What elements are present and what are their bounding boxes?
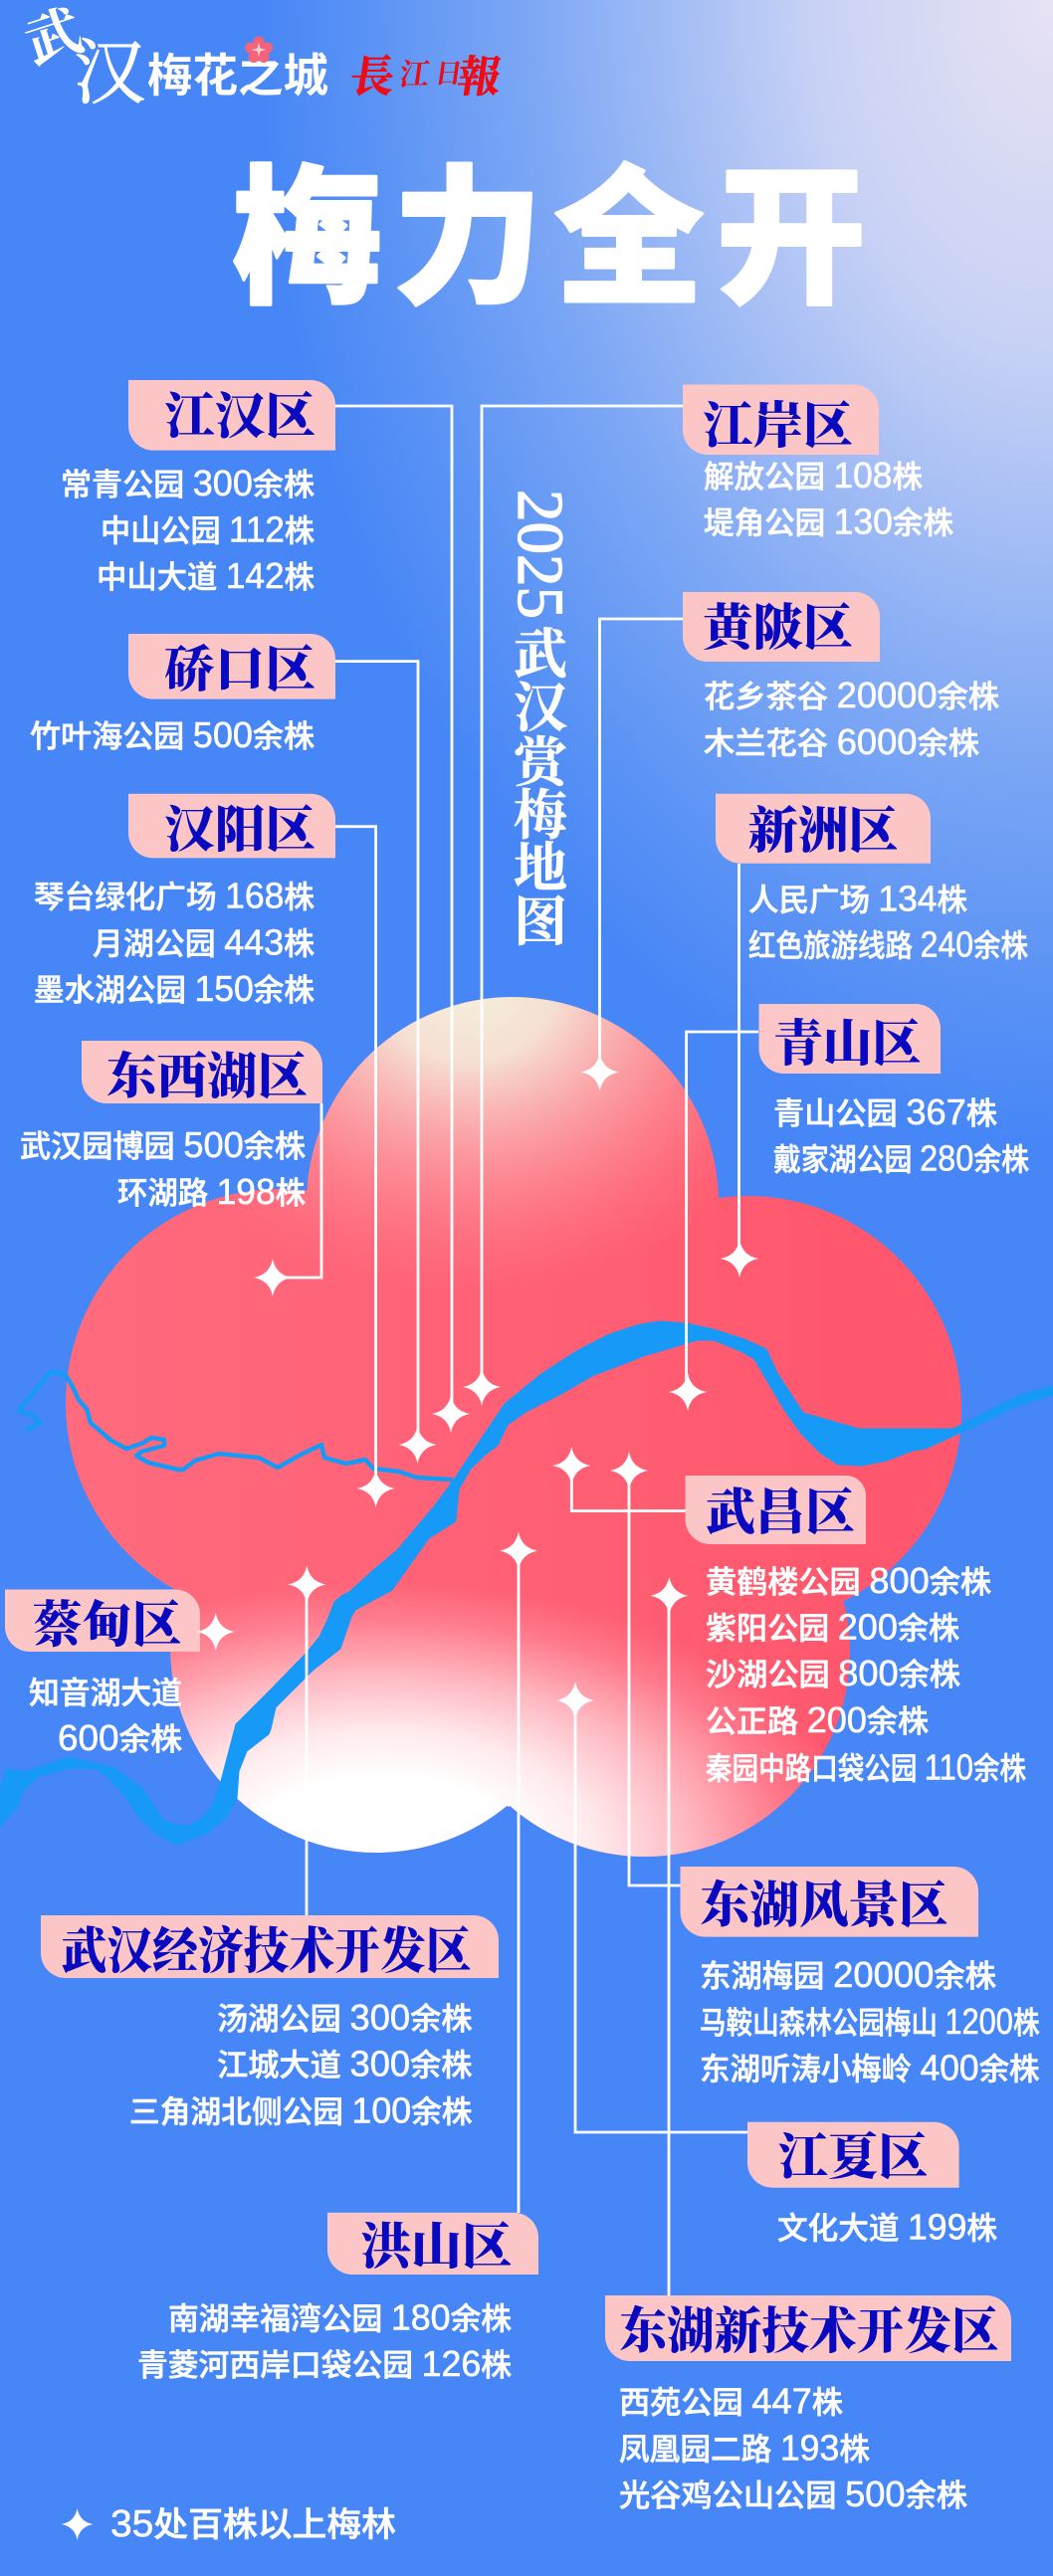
- panel: 黄陂区: 木兰花谷 6000余株: [704, 721, 979, 762]
- connector and marker: 洪山区: [500, 1532, 537, 2213]
- panel: 东西湖区: 环湖路 198株: [117, 1171, 306, 1212]
- panel: 东湖风景区: 马鞍山森林公园梅山 1200株: [700, 2001, 1039, 2042]
- connector and marker: 东西湖区: [254, 1103, 321, 1296]
- logo: 长江日报: 長: [347, 53, 397, 101]
- panel: 新洲区: 红色旅游线路 240余株: [748, 923, 1028, 965]
- logo: 武汉梅花之城: 汉: [74, 34, 145, 113]
- panel: 武昌区: 公正路 200余株: [706, 1699, 929, 1740]
- connector and marker: 江岸区: [463, 406, 683, 1406]
- panel: 东西湖区: [20, 1041, 322, 1212]
- panel: 东湖风景区: 东湖听涛小梅岭 400余株: [700, 2048, 1039, 2087]
- panel: 硚口区: 竹叶海公园 500余株: [30, 714, 315, 755]
- panel: 东湖新技术开发区: 西苑公园 447株: [619, 2380, 843, 2422]
- panel: 新洲区: [716, 794, 1028, 965]
- connector and marker: 东湖风景区: [610, 1452, 681, 1885]
- panel: 东湖新技术开发区: 凤凰园二路 193株: [619, 2428, 870, 2468]
- vertical subtitle: 2025: [504, 490, 576, 619]
- connector and marker: 武昌区: [552, 1447, 686, 1510]
- panel: 新洲区: 人民广场 134株: [748, 878, 967, 919]
- title: 梅力全开: [233, 155, 866, 322]
- logo: 长江日报: 報: [455, 54, 504, 101]
- panel: 东湖风景区: 东湖风景区: [701, 1878, 948, 1933]
- panel: 东西湖区: 东西湖区: [106, 1049, 308, 1104]
- logo: 武汉梅花之城: 梅花之城: [147, 50, 328, 101]
- panel: 江岸区: [683, 384, 953, 541]
- panel: 青山区: 青山公园 367株: [773, 1091, 997, 1132]
- panel: 江汉区: 中山公园 112株: [101, 509, 315, 549]
- panel: 武昌区: 沙湖公园 800余株: [706, 1653, 960, 1693]
- connector and marker: 东湖新技术开发区: [650, 1577, 688, 2295]
- panel: 武昌区: [686, 1476, 1026, 1787]
- panel: 江夏区: [747, 2122, 997, 2247]
- vertical subtitle: [504, 490, 576, 952]
- panel: 东湖风景区: [681, 1867, 1039, 2087]
- panel: 黄陂区: 花乡茶谷 20000余株: [704, 675, 999, 715]
- panel: 洪山区: 洪山区: [360, 2219, 512, 2275]
- panel: 蔡甸区: [5, 1590, 235, 1758]
- panel: 硚口区: [30, 634, 335, 755]
- panel: 青山区: 青山区: [774, 1016, 922, 1072]
- panel: 蔡甸区: 知音湖大道: [29, 1676, 182, 1711]
- logo: 长江日报: 日: [433, 59, 464, 89]
- panel: 洪山区: [137, 2213, 538, 2384]
- panel: 江岸区: 堤角公园 130余株: [704, 501, 953, 541]
- plum blossom map shape: [66, 997, 961, 1857]
- connector and marker: 江汉区: [335, 406, 470, 1433]
- connector and marker: 黄陂区: [581, 619, 683, 1090]
- panel: 黄陂区: [683, 592, 999, 762]
- legend: 35处百株以上梅林: 35处百株以上梅林: [110, 2503, 396, 2545]
- panel: 硚口区: 硚口区: [164, 642, 316, 697]
- logo: 长江日报: 江: [397, 58, 432, 92]
- river: Han: [19, 1371, 451, 1480]
- panel: 东湖新技术开发区: [605, 2295, 1011, 2514]
- panel: 武昌区: 武昌区: [706, 1485, 855, 1540]
- panel: 汉阳区: [34, 794, 335, 1009]
- panel: 蔡甸区: 600余株: [58, 1717, 182, 1758]
- panel: 武汉经济技术开发区: 江城大道 300余株: [217, 2044, 473, 2083]
- connector and marker: 汉阳区: [335, 827, 395, 1507]
- panel: 洪山区: 南湖幸福湾公园 180余株: [168, 2296, 512, 2338]
- panel: 青山区: [758, 1004, 1029, 1178]
- connector and marker: 青山区: [669, 1032, 758, 1411]
- panel: 江汉区: 常青公园 300余株: [61, 463, 315, 503]
- panel: 汉阳区: 琴台绿化广场 168株: [34, 876, 315, 915]
- panel: 武昌区: 黄鹤楼公园 800余株: [706, 1560, 991, 1601]
- panel: 洪山区: 青菱河西岸口袋公园 126株: [137, 2343, 512, 2384]
- panel: 江汉区: 中山大道 142株: [97, 555, 315, 596]
- panel: 汉阳区: 墨水湖公园 150余株: [34, 968, 315, 1009]
- logo: 武汉梅花之城: [18, 0, 328, 113]
- panel: 江岸区: 解放公园 108株: [704, 455, 923, 495]
- connector and marker: 武汉经济技术开发区: [288, 1566, 325, 1915]
- logo: 长江日报: [347, 53, 504, 101]
- panel: 汉阳区: 月湖公园 443株: [93, 921, 315, 963]
- panel: 东湖新技术开发区: 东湖新技术开发区: [619, 2303, 999, 2359]
- panel: 江夏区: 文化大道 199株: [777, 2207, 997, 2247]
- panel: 江汉区: 江汉区: [164, 388, 316, 444]
- connector and marker: 江夏区: [556, 1682, 747, 2132]
- panel: 东西湖区: 武汉园博园 500余株: [20, 1124, 306, 1165]
- panel: 武昌区: 秦园中路口袋公园 110余株: [706, 1747, 1026, 1787]
- panel: 江汉区: [61, 380, 335, 596]
- vertical subtitle: 武汉赏梅地图: [514, 625, 573, 952]
- panel: 江岸区: 江岸区: [703, 398, 853, 454]
- panel: 江夏区: 江夏区: [778, 2129, 928, 2185]
- panel: 武汉经济技术开发区: 武汉经济技术开发区: [62, 1923, 472, 1979]
- panel: 东湖风景区: 东湖梅园 20000余株: [700, 1954, 996, 1995]
- panel: 武汉经济技术开发区: [41, 1915, 499, 2131]
- panel: 东湖新技术开发区: 光谷鸡公山公园 500余株: [619, 2474, 967, 2514]
- panel: 青山区: 戴家湖公园 280余株: [773, 1138, 1029, 1178]
- panel: 汉阳区: 汉阳区: [164, 802, 316, 858]
- panel: 新洲区: 新洲区: [748, 803, 898, 859]
- panel: 武昌区: 紫阳公园 200余株: [706, 1606, 959, 1648]
- connector and marker: 新洲区: [721, 864, 758, 1278]
- panel: 武汉经济技术开发区: 汤湖公园 300余株: [217, 1997, 473, 2038]
- logo: 武汉梅花之城: 武: [18, 0, 90, 76]
- connector and marker: 硚口区: [335, 662, 436, 1464]
- panel: 蔡甸区: 蔡甸区: [32, 1597, 181, 1653]
- river: Yangtze: [0, 1321, 1053, 1845]
- panel: 武汉经济技术开发区: 三角湖北侧公园 100余株: [129, 2089, 472, 2131]
- panel: 黄陂区: 黄陂区: [703, 600, 853, 656]
